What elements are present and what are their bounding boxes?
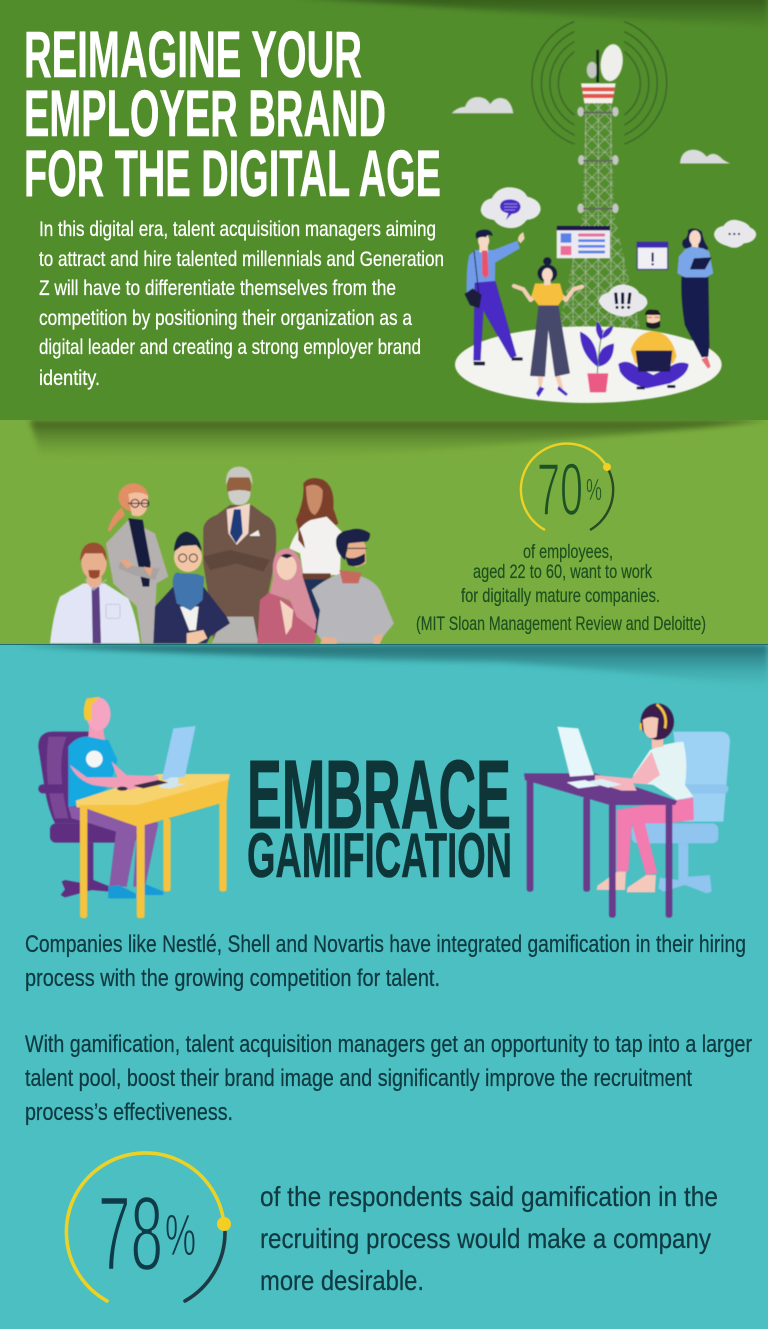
chair [38, 732, 137, 897]
chart: 70% ring: 70 [537, 448, 583, 531]
statistic text: for digitally mature companies. [461, 585, 660, 607]
illustration: communication tower with people [452, 22, 756, 403]
monitor and keyboard [557, 727, 622, 788]
intro text: competition by positioning their organization as a [39, 306, 412, 330]
shadow band [28, 420, 761, 452]
heading: embrace gamification: EMBRACE [247, 740, 511, 849]
figure: woman with glasses in grey jacket [106, 483, 168, 643]
statistic text: 78% [260, 1181, 718, 1296]
chart: 78% ring [66, 1153, 231, 1301]
intro text: digital leader and creating a strong employer brand [39, 335, 421, 359]
title [24, 17, 441, 210]
figure: woman shrugging [514, 257, 582, 397]
icon: ellipsis bubble [714, 220, 756, 248]
gamer legs [68, 807, 163, 898]
panel: digital age header [0, 0, 768, 420]
statistic text: 78%: more desirable. [260, 1265, 424, 1296]
intro text [39, 217, 444, 390]
icon: alert window [637, 242, 668, 269]
chart: 78% ring: 78 [98, 1175, 163, 1293]
intro text: In this digital era, talent acquisition managers aiming [39, 217, 436, 241]
figure: woman in hijab [257, 548, 317, 643]
icon: exclamation bubble [599, 285, 647, 317]
gamer arm [595, 752, 660, 791]
gamification paragraphs [25, 931, 752, 1126]
chair [632, 732, 730, 893]
icon: lattice tower [560, 43, 640, 329]
figure: man waving [465, 230, 525, 365]
statistic text: of employees, [523, 541, 613, 563]
icon: speech bubble with chat [481, 187, 541, 228]
title: FOR THE DIGITAL AGE [24, 136, 441, 210]
title: REIMAGINE YOUR [24, 17, 362, 91]
figure: woman with tablet [677, 229, 713, 369]
figure: bearded man in sweater [312, 529, 394, 644]
gamer torso and head [633, 703, 693, 800]
figure: man with blue scarf [153, 532, 230, 644]
gamification paragraphs: process’s effectiveness. [25, 1099, 233, 1126]
panel: employee statistic [0, 420, 768, 645]
icon: potted plant [580, 322, 614, 392]
intro text: identity. [39, 366, 100, 390]
statistic text: aged 22 to 60, want to work [473, 561, 652, 583]
intro text: to attract and hire talented millennials and Generation [39, 247, 444, 271]
gamer legs [597, 798, 694, 892]
heading: embrace gamification: GAMIFICATION [247, 821, 512, 891]
figure: older man in suit [203, 467, 276, 643]
purple desk [524, 773, 677, 918]
panel: embrace gamification [0, 644, 768, 1329]
statistic text: 78%: recruiting process would make a company [260, 1223, 711, 1254]
illustration: diverse group of employees [50, 467, 394, 644]
gamer arm [70, 762, 158, 790]
figure: woman in white shirt [289, 478, 342, 633]
gamer torso [68, 697, 117, 807]
chart: 70% ring: % [586, 472, 602, 507]
floor ellipse [455, 326, 722, 403]
figure: man in striped tie [50, 543, 140, 643]
icon: clouds [452, 97, 731, 164]
gamification paragraphs: process with the growing competition for talent. [25, 965, 440, 992]
icon: web window [557, 226, 610, 258]
icon: signal arcs [532, 22, 667, 144]
illustration: gamer at purple desk [524, 703, 730, 918]
statistic text [416, 541, 706, 635]
illustration: gamer at yellow desk [38, 697, 230, 918]
title: EMPLOYER BRAND [24, 76, 386, 150]
chart: 78% ring: % [165, 1203, 196, 1268]
yellow desk [76, 774, 230, 918]
intro text: Z will have to differentiate themselves from the [39, 276, 396, 300]
monitor and keyboard [117, 726, 196, 791]
figure: seated man with laptop [618, 310, 689, 389]
heading: embrace gamification [247, 740, 512, 891]
